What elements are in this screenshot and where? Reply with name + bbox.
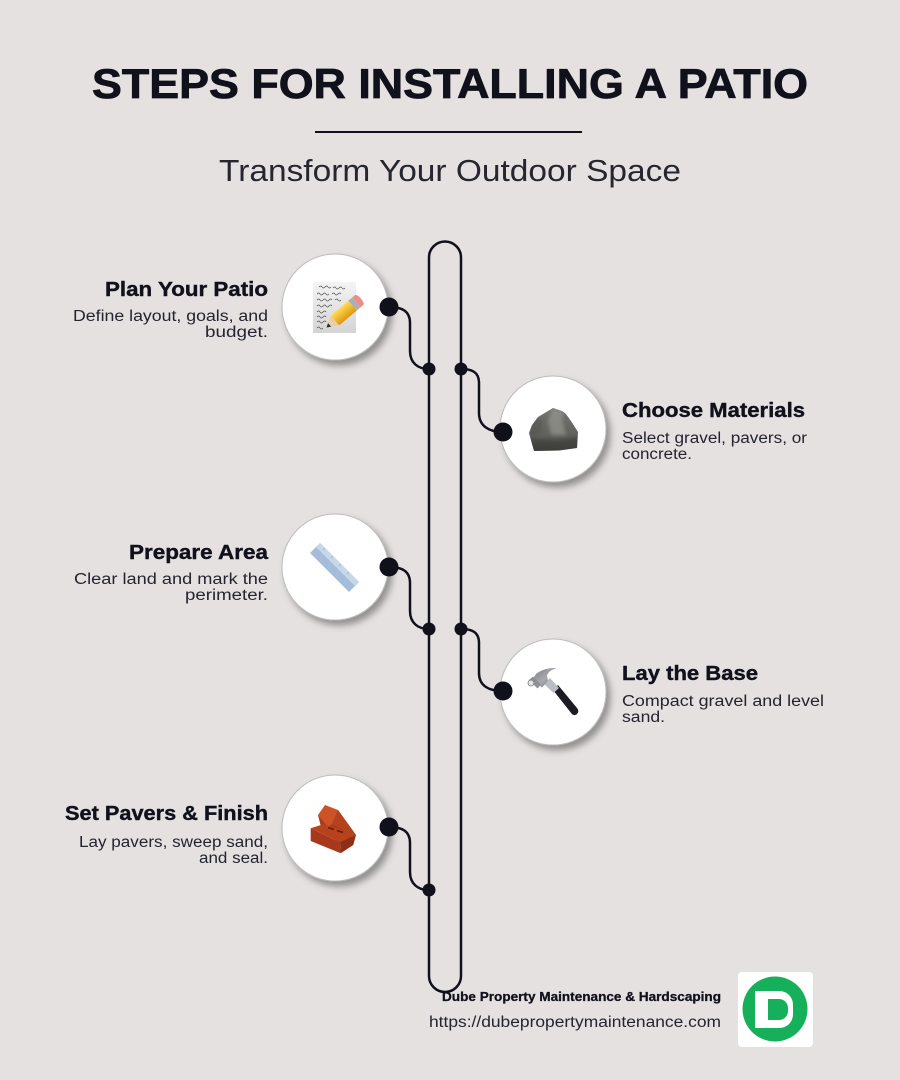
step 4 icon circle xyxy=(500,639,606,745)
step 1 description xyxy=(73,308,268,341)
step 1 connector xyxy=(389,307,429,369)
step 1 description: budget. xyxy=(205,324,268,341)
icon: ruler xyxy=(310,543,359,592)
step 2 heading: Choose Materials xyxy=(622,400,805,422)
title: STEPS FOR INSTALLING A PATIO xyxy=(92,60,808,107)
title divider xyxy=(315,131,582,133)
step 4: lay the base xyxy=(454,622,824,745)
step 3 description: Clear land and mark the xyxy=(74,571,268,588)
step 4 track node xyxy=(454,622,468,636)
step 5 heading: Set Pavers & Finish xyxy=(65,803,268,825)
step 3 track node xyxy=(422,622,436,636)
step 2 description: Select gravel, pavers, or xyxy=(622,430,807,447)
step 5 icon circle xyxy=(282,775,388,881)
step 2 track node xyxy=(454,362,468,376)
step 4 description xyxy=(622,693,824,726)
step 3 description: perimeter. xyxy=(185,587,268,604)
infographic canvas xyxy=(65,68,823,1047)
step 2: choose materials xyxy=(454,362,807,482)
step 4 connector xyxy=(461,629,503,691)
icon: rock xyxy=(529,408,578,451)
step 5 description xyxy=(79,834,268,867)
step 1 heading: Plan Your Patio xyxy=(105,279,268,301)
step 5 connector xyxy=(389,827,429,890)
icon: paper and pencil xyxy=(313,282,365,333)
step 4 node xyxy=(494,682,512,700)
step 4 description: Compact gravel and level xyxy=(622,693,824,710)
icon: hammer xyxy=(528,668,578,715)
step 5: set pavers and finish xyxy=(65,775,436,896)
step 3 heading: Prepare Area xyxy=(129,542,269,564)
step 4 description: sand. xyxy=(622,709,665,726)
step 2 description xyxy=(622,430,807,463)
step 5 node xyxy=(380,818,398,836)
step 2 description: concrete. xyxy=(622,446,692,463)
step 3 icon circle xyxy=(282,514,388,620)
step 3: prepare area xyxy=(74,514,436,636)
logo xyxy=(738,972,813,1047)
step 5 description: and seal. xyxy=(199,850,268,867)
step 3 connector xyxy=(389,567,429,629)
subtitle: Transform Your Outdoor Space xyxy=(219,154,681,188)
step 2 icon circle xyxy=(500,376,606,482)
footer url: https://dubepropertymaintenance.com xyxy=(429,1014,721,1031)
icon: bricks xyxy=(311,805,356,853)
step 5 track node xyxy=(422,884,436,896)
step 3 description xyxy=(74,571,268,604)
footer company name: Dube Property Maintenance & Hardscaping xyxy=(442,989,721,1004)
step 1 description: Define layout, goals, and xyxy=(73,308,268,325)
step 1 node xyxy=(380,298,398,316)
step 5 description: Lay pavers, sweep sand, xyxy=(79,834,268,851)
step 1 track node xyxy=(422,362,436,376)
step 4 heading: Lay the Base xyxy=(622,663,758,685)
step 3 node xyxy=(380,558,398,576)
step 2 node xyxy=(494,422,512,442)
central timeline track xyxy=(429,242,461,992)
step 1: plan your patio xyxy=(73,254,436,376)
step 1 icon circle xyxy=(282,254,388,360)
step 2 connector xyxy=(461,369,503,432)
